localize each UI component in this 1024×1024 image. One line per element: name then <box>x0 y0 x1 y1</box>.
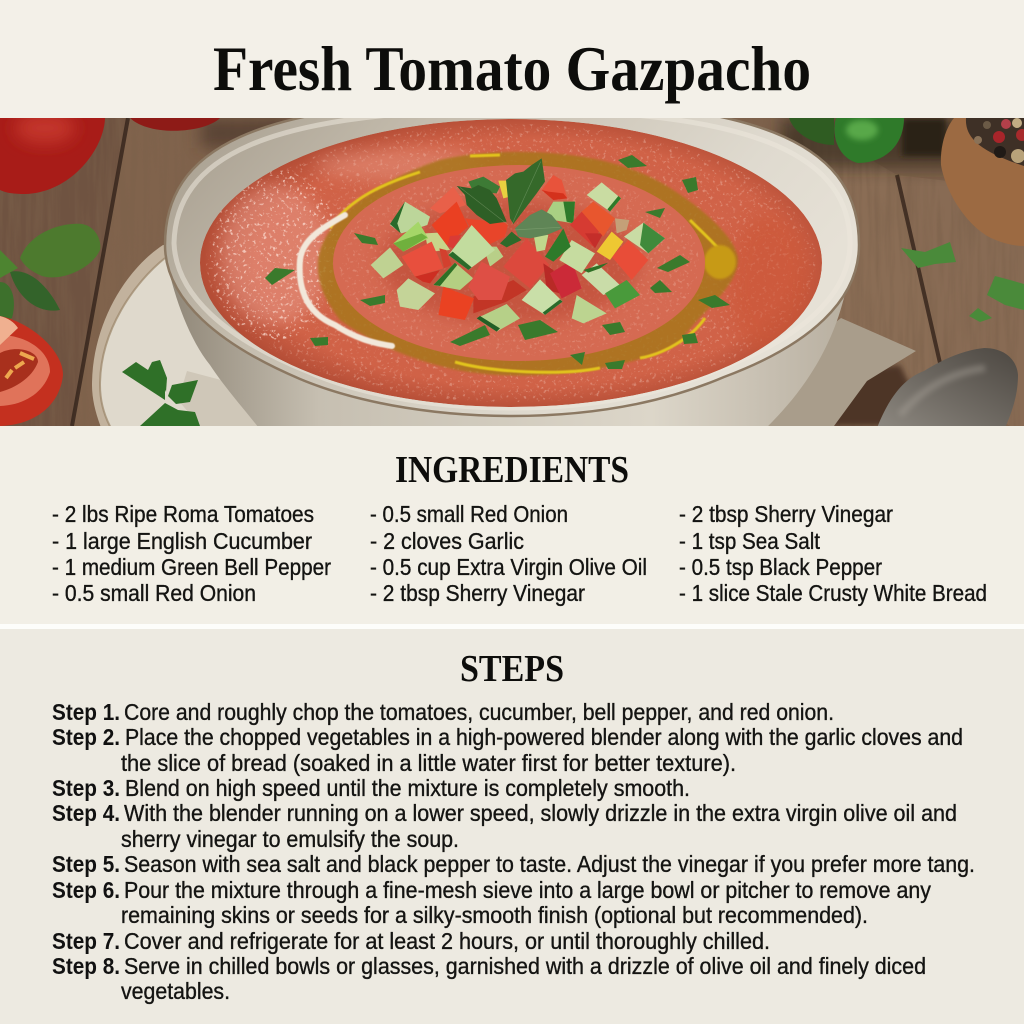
ingredients column 2: - 0.5 small Red Onion <box>370 501 568 527</box>
sliced tomato <box>0 316 63 426</box>
step 4: Step 4. <box>52 800 120 826</box>
centre dice <box>438 238 582 332</box>
linen napkin <box>178 318 916 426</box>
ingredients column 1: - 1 large English Cucumber <box>52 528 312 554</box>
step 2 <box>52 724 963 776</box>
inner soup pool <box>333 165 705 361</box>
step 6: Pour the mixture through a fine-mesh sieve into a large bowl or pitcher to remove any <box>124 877 931 903</box>
step 4: With the blender running on a lower speed, slowly drizzle in the extra virgin olive oil and <box>124 800 957 826</box>
heading: ingredients: INGREDIENTS <box>395 449 629 491</box>
right dice <box>533 182 665 323</box>
ingredients column 2: - 2 tbsp Sherry Vinegar <box>370 580 585 606</box>
step 2: Step 2. <box>52 724 120 750</box>
wooden bowl of peppercorns <box>941 118 1024 246</box>
step 6 <box>52 877 931 928</box>
ingredients column 1: - 1 medium Green Bell Pepper <box>52 554 331 580</box>
ingredients column 2 <box>370 501 647 606</box>
step 5: Step 5. <box>52 851 120 877</box>
ingredients column 1: - 2 lbs Ripe Roma Tomatoes <box>52 501 314 527</box>
step 7: Cover and refrigerate for at least 2 hours, or until thoroughly chilled. <box>124 928 770 954</box>
step 6: remaining skins or seeds for a silky-smooth finish (optional but recommended). <box>121 902 868 928</box>
step 1: Step 1. <box>52 699 120 725</box>
step 3: Step 3. <box>52 775 120 801</box>
step 8: Serve in chilled bowls or glasses, garnished with a drizzle of olive oil and finely diced <box>124 953 926 979</box>
bowl rim and inner wall <box>165 100 859 416</box>
step 2: Place the chopped vegetables in a high-powered blender along with the garlic cloves and <box>125 724 963 750</box>
step 5: Season with sea salt and black pepper to taste. Adjust the vinegar if you prefer more tang. <box>124 851 975 877</box>
panel: steps <box>0 629 1024 1024</box>
diced vegetables garnish <box>371 158 665 332</box>
olive oil ring <box>318 152 738 375</box>
back vegetables <box>430 175 575 223</box>
wooden table <box>0 118 1024 426</box>
title: Fresh Tomato Gazpacho <box>213 33 811 104</box>
spoon <box>877 348 1018 428</box>
step 1: Core and roughly chop the tomatoes, cucumber, bell pepper, and red onion. <box>124 699 834 725</box>
step 6: Step 6. <box>52 877 120 903</box>
step 8: vegetables. <box>121 978 230 1004</box>
plate <box>92 245 220 426</box>
panel: ingredients <box>0 426 1024 624</box>
cream swirl <box>300 215 392 346</box>
left cucumber and tomato dice <box>371 202 508 310</box>
ingredients column 1: - 0.5 small Red Onion <box>52 580 256 606</box>
step 4: sherry vinegar to emulsify the soup. <box>121 826 459 852</box>
ingredients column 1 <box>52 501 331 606</box>
ingredients column 2: - 0.5 cup Extra Virgin Olive Oil <box>370 554 647 580</box>
step 7: Step 7. <box>52 928 120 954</box>
step 3: Blend on high speed until the mixture is completely smooth. <box>125 775 690 801</box>
parsley leaves <box>457 158 563 247</box>
step 4 <box>52 800 957 852</box>
hero photo: bowl of gazpacho on wooden table <box>0 100 1024 432</box>
ingredients column 3: - 2 tbsp Sherry Vinegar <box>679 501 893 527</box>
green peppers <box>789 118 904 163</box>
ingredients column 3: - 0.5 tsp Black Pepper <box>679 554 882 580</box>
herb flecks on soup <box>265 155 730 369</box>
basil leaves <box>0 224 100 319</box>
scattered herbs on table <box>901 242 1024 322</box>
ingredients column 3: - 1 tsp Sea Salt <box>679 528 821 554</box>
ingredients column 2: - 2 cloves Garlic <box>370 528 524 554</box>
step 2: the slice of bread (soaked in a little water first for better texture). <box>121 750 736 776</box>
step 8 <box>52 953 926 1004</box>
bowl <box>165 100 859 432</box>
gazpacho soup <box>200 119 822 407</box>
step 8: Step 8. <box>52 953 120 979</box>
tomato top left <box>0 112 220 194</box>
ingredients column 3 <box>679 501 987 606</box>
ingredients column 3: - 1 slice Stale Crusty White Bread <box>679 580 987 606</box>
parsley sprig on plate <box>122 360 200 426</box>
bowl body <box>171 280 844 426</box>
heading: steps: STEPS <box>460 648 564 690</box>
